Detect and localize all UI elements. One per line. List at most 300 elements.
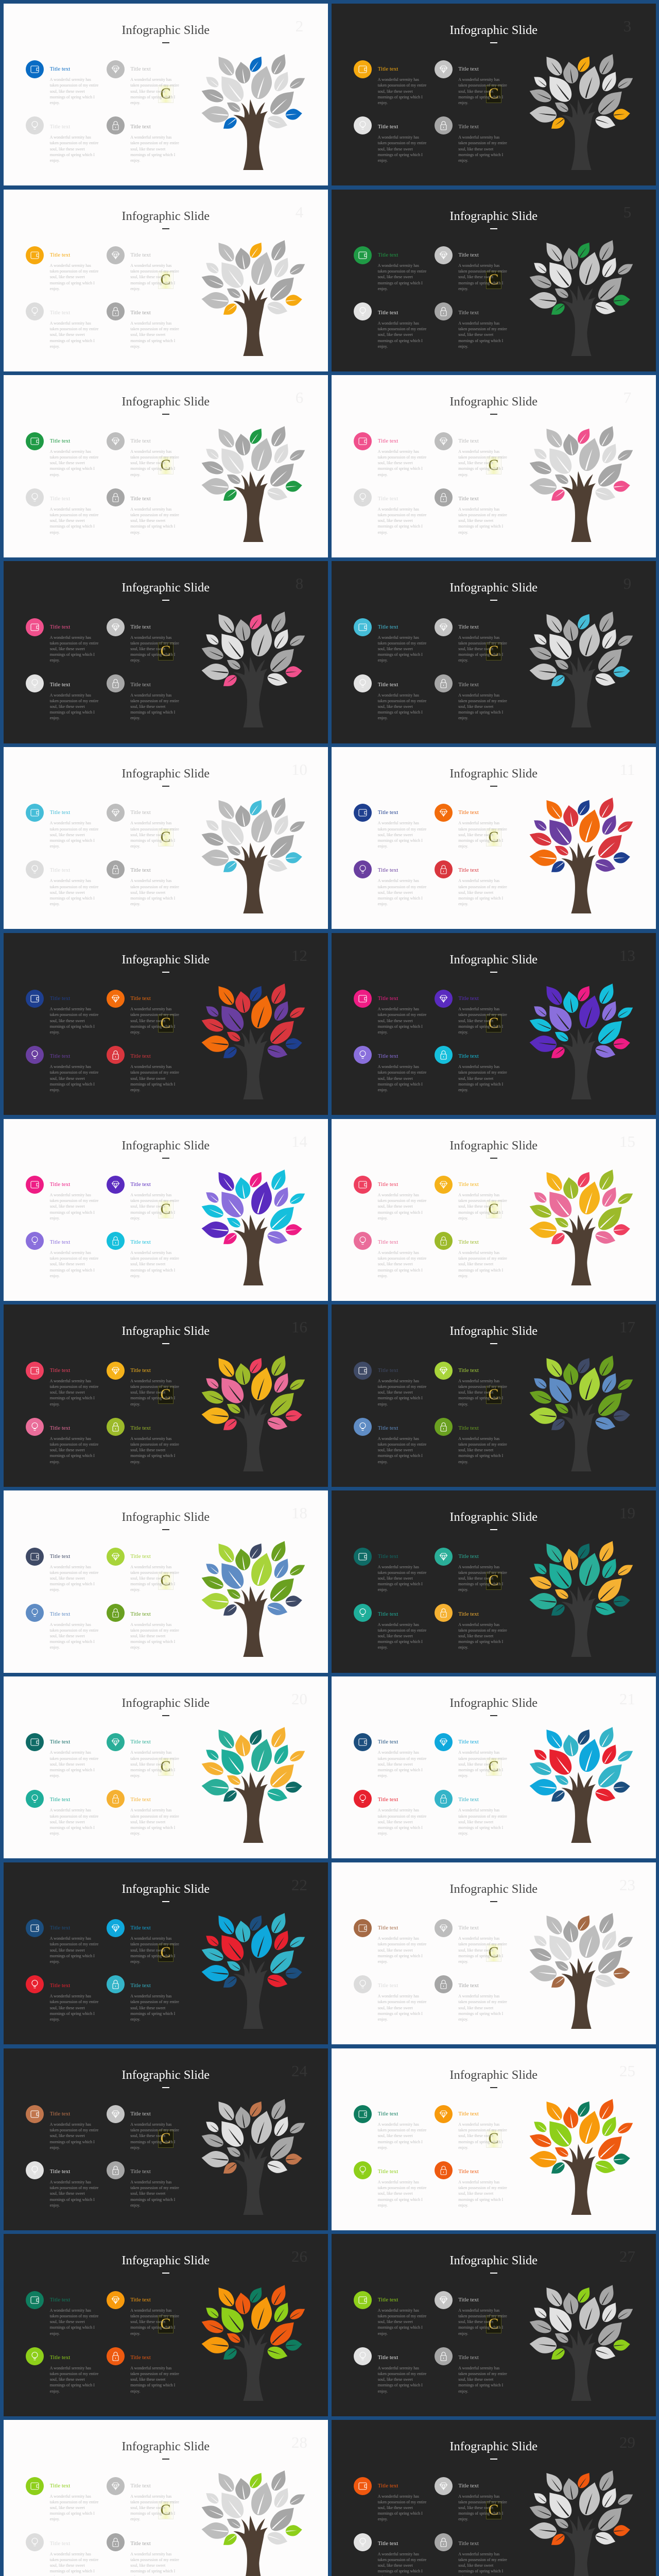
item 2 [106,1733,183,1785]
text: soul, like these sweet [378,833,413,837]
text: mornings of spring which I [50,896,95,901]
title: Infographic Slide [449,395,537,409]
text: soul, like these sweet [130,2563,165,2568]
text: A wonderful serenity has [130,1750,171,1755]
logo [158,828,173,846]
text: mornings of spring which I [378,1396,423,1400]
text: A wonderful serenity has [378,1565,419,1569]
slide 2 [3,4,328,185]
icon [354,246,372,264]
item 4 [435,116,507,163]
icon [435,116,453,134]
text: A wonderful serenity has [458,2308,499,2313]
page number: 13 [619,946,635,964]
text: soul, like these sweet [458,1204,493,1209]
text: soul, like these sweet [378,518,413,523]
item 3 [354,2347,431,2399]
text: soul, like these sweet [378,2319,413,2324]
item 2 [106,1548,183,1599]
logo [158,1758,173,1776]
item 3 [26,1604,103,1655]
text: soul, like these sweet [458,2377,493,2382]
icon [26,2161,44,2179]
text: taken possession of my entire [130,141,179,145]
text: enjoy. [458,2389,468,2394]
heading: Title text [130,438,151,444]
tree [503,960,657,1115]
tree [503,403,657,557]
text: A wonderful serenity has [458,1808,499,1812]
text: soul, like these sweet [130,2505,165,2510]
title: Infographic Slide [122,1324,210,1338]
tree [175,774,330,929]
text: mornings of spring which I [458,1082,503,1087]
text: A wonderful serenity has [378,2552,419,2556]
icon [26,2533,44,2551]
icon [26,860,44,878]
text: taken possession of my entire [458,2314,507,2318]
text: enjoy. [130,158,140,163]
logo: C [488,271,498,287]
text: A wonderful serenity has [378,1808,419,1812]
heading: Title text [130,1367,151,1374]
text: taken possession of my entire [130,513,179,517]
text: taken possession of my entire [130,827,179,832]
text: enjoy. [458,286,468,291]
item 1 [354,990,431,1041]
icon [106,1919,125,1937]
text [458,1250,507,1279]
text: A wonderful serenity has [378,1379,419,1383]
heading: Title text [50,624,70,630]
text: enjoy. [378,158,388,163]
logo [158,2130,173,2147]
title rule [162,414,169,415]
item 1 [354,60,426,105]
text: soul, like these sweet [50,1820,85,1824]
text: enjoy. [50,2145,60,2150]
icon [435,2533,452,2551]
text: enjoy. [458,844,468,849]
logo [486,85,501,103]
text: A wonderful serenity has [378,77,419,82]
text: A wonderful serenity has [378,507,419,512]
heading: Title text [130,1611,151,1617]
text: taken possession of my entire [50,83,98,88]
text [378,1993,426,2022]
text: taken possession of my entire [458,455,507,460]
icon [354,804,372,822]
logo: C [160,1572,171,1589]
text: enjoy. [130,530,140,535]
text [50,1993,98,2022]
title: Infographic Slide [122,1882,210,1896]
text: A wonderful serenity has [458,77,499,82]
text: mornings of spring which I [458,1768,503,1772]
text: enjoy. [130,902,140,906]
item 3 [26,1975,103,2027]
text [458,2122,507,2150]
text: soul, like these sweet [458,1634,493,1638]
item 3 [354,1604,431,1655]
icon [435,2161,452,2179]
title: Infographic Slide [122,953,210,967]
item 2 [435,246,512,298]
icon [106,2291,125,2309]
text: enjoy. [458,1645,468,1650]
text [50,692,98,721]
tree [175,2262,330,2416]
text: enjoy. [50,1831,60,1836]
title: Infographic Slide [122,1510,210,1524]
item 2 [435,2291,512,2343]
heading: Title text [378,1239,398,1245]
text: mornings of spring which I [378,1453,423,1458]
text: A wonderful serenity has [50,1379,91,1383]
tree [175,1332,330,1487]
text: mornings of spring which I [50,652,95,657]
text: A wonderful serenity has [130,693,171,698]
text: A wonderful serenity has [130,1622,171,1627]
page number: 5 [623,203,631,221]
page number: 28 [291,2433,307,2451]
text: mornings of spring which I [378,1210,423,1215]
text: A wonderful serenity has [378,878,419,883]
icon [354,1548,372,1566]
item 3 [26,116,98,163]
icon [106,2161,125,2179]
text: soul, like these sweet [458,332,493,337]
heading: Title text [50,1367,70,1374]
text: taken possession of my entire [458,1384,507,1389]
text: taken possession of my entire [378,1198,426,1203]
text: mornings of spring which I [50,1954,95,1958]
title: Infographic Slide [449,1324,537,1338]
text: mornings of spring which I [378,2383,423,2387]
text [130,321,179,349]
heading: Title text [458,1982,479,1989]
logo [158,456,173,474]
item 2 [107,60,179,105]
heading: Title text [50,2297,70,2303]
text: soul, like these sweet [130,1204,165,1209]
item 4 [435,1975,512,2027]
text: enjoy. [378,2145,388,2150]
title: Infographic Slide [449,209,537,223]
text: A wonderful serenity has [130,2122,171,2127]
logo: C [160,2315,171,2332]
text: A wonderful serenity has [378,1622,419,1627]
text: A wonderful serenity has [50,1750,91,1755]
text: A wonderful serenity has [130,1808,171,1812]
icon [435,60,453,78]
text: mornings of spring which I [378,2140,423,2144]
text: taken possession of my entire [130,327,179,331]
text: enjoy. [50,1645,60,1650]
heading: Title text [458,624,479,630]
tree [503,2447,657,2576]
heading: Title text [378,624,398,630]
text: enjoy. [50,100,60,105]
text: mornings of spring which I [130,338,175,343]
text: soul, like these sweet [130,2191,165,2196]
heading: Title text [378,2540,398,2547]
text: taken possession of my entire [50,1942,98,1946]
tree [503,588,657,743]
icon [26,432,44,450]
text [130,77,179,105]
text: soul, like these sweet [50,833,85,837]
item 4 [106,1418,183,1469]
text: mornings of spring which I [130,2325,175,2330]
text: soul, like these sweet [458,704,493,709]
text: A wonderful serenity has [378,263,419,268]
text: A wonderful serenity has [458,1250,499,1255]
heading: Title text [378,1053,398,1059]
icon [354,860,372,878]
slide 10 [3,747,328,929]
text: enjoy. [378,844,388,849]
text: taken possession of my entire [458,1570,507,1575]
text: enjoy. [130,1773,140,1778]
text: A wonderful serenity has [378,2308,419,2313]
text [458,1436,507,1465]
item 4 [435,302,512,354]
text [49,321,98,349]
text: A wonderful serenity has [130,878,171,883]
title rule [162,972,169,973]
text: soul, like these sweet [378,332,413,337]
icon [107,116,125,134]
icon [435,2347,452,2365]
text: taken possession of my entire [50,1198,98,1203]
text [50,635,98,664]
text: mornings of spring which I [458,2511,503,2516]
slide 17 [332,1304,656,1487]
text: mornings of spring which I [130,1825,175,1830]
icon [26,1232,44,1250]
text: enjoy. [458,2517,468,2521]
title: Infographic Slide [122,581,210,595]
text: mornings of spring which I [50,1268,95,1273]
text: enjoy. [458,1216,468,1221]
item 1 [26,60,98,105]
text: enjoy. [50,2017,60,2022]
item 2 [107,246,179,291]
icon [354,302,372,320]
heading: Title text [458,1739,479,1745]
text: mornings of spring which I [378,2569,423,2573]
logo [158,642,173,660]
logo [486,1200,501,1218]
page number: 12 [291,946,307,964]
heading: Title text [130,2297,151,2303]
item 4 [435,1232,512,1283]
item 4 [106,2347,183,2399]
text: taken possession of my entire [50,455,98,460]
text: A wonderful serenity has [458,321,499,326]
text: soul, like these sweet [378,461,413,465]
text [130,1006,179,1035]
text: mornings of spring which I [130,2140,175,2144]
title: Infographic Slide [449,2439,537,2453]
heading: Title text [50,2168,70,2175]
text: taken possession of my entire [458,2185,507,2190]
text: taken possession of my entire [458,1256,507,1261]
heading: Title text [130,867,151,873]
text: soul, like these sweet [130,1076,165,1081]
text [130,2494,179,2522]
text [130,449,179,478]
text: enjoy. [130,844,140,849]
heading: Title text [378,2297,398,2303]
text: A wonderful serenity has [50,1007,91,1011]
text: soul, like these sweet [458,89,493,94]
text: enjoy. [130,1088,140,1092]
text: soul, like these sweet [458,2563,493,2568]
icon [106,1232,125,1250]
text: soul, like these sweet [378,1204,413,1209]
text: taken possession of my entire [130,1814,179,1819]
text: A wonderful serenity has [130,449,171,454]
text: soul, like these sweet [378,1762,413,1767]
item 1 [354,1733,431,1785]
text: taken possession of my entire [50,1756,98,1761]
text [458,2551,507,2576]
item 4 [435,2347,512,2399]
title: Infographic Slide [122,1696,210,1710]
text: soul, like these sweet [50,1262,85,1266]
item 1 [354,1362,431,1413]
text: taken possession of my entire [130,1756,179,1761]
title rule [490,1901,497,1902]
icon [106,1790,125,1808]
heading: Title text [50,1925,70,1931]
item 4 [107,302,179,349]
text: mornings of spring which I [458,1268,503,1273]
logo: C [160,1386,171,1403]
heading: Title text [50,252,70,258]
title: Infographic Slide [449,2068,537,2081]
item 3 [26,488,103,540]
text: taken possession of my entire [130,1012,179,1017]
heading: Title text [458,1611,479,1617]
page number: 23 [619,1876,635,1894]
heading: Title text [458,310,479,316]
icon [26,804,44,822]
text: taken possession of my entire [458,269,507,274]
text [458,1936,507,1964]
text [458,1192,507,1221]
slide 18 [3,1490,328,1673]
page number: 2 [296,17,303,35]
icon [435,432,452,450]
text: taken possession of my entire [458,1628,507,1633]
text: taken possession of my entire [50,327,98,331]
text: taken possession of my entire [130,83,179,88]
text: A wonderful serenity has [458,1436,499,1441]
title: Infographic Slide [122,2253,210,2267]
text: enjoy. [50,1030,60,1035]
logo [486,271,501,289]
text: taken possession of my entire [130,2128,179,2132]
text: taken possession of my entire [130,1256,179,1261]
text: A wonderful serenity has [50,693,91,698]
title rule [490,600,497,601]
logo [486,2501,501,2519]
text: soul, like these sweet [378,1948,413,1953]
page number: 15 [619,1132,635,1150]
heading: Title text [130,496,151,502]
item 4 [106,488,183,540]
item 2 [435,804,512,855]
text [378,506,426,535]
icon [354,2291,372,2309]
logo [158,271,173,289]
heading: Title text [378,124,398,130]
logo: C [160,1944,171,1961]
text: taken possession of my entire [50,1442,98,1447]
text: taken possession of my entire [50,1256,98,1261]
text: mornings of spring which I [458,1453,503,1458]
text: enjoy. [130,1460,140,1464]
item 3 [354,1046,431,1097]
text [378,2122,426,2150]
title: Infographic Slide [122,2068,210,2081]
item 2 [106,2291,183,2343]
text: A wonderful serenity has [378,2122,419,2127]
icon [106,2477,125,2495]
text: mornings of spring which I [378,152,423,157]
text: A wonderful serenity has [458,507,499,512]
icon [435,246,452,264]
item 4 [435,1046,512,1097]
text: soul, like these sweet [130,1576,165,1581]
text [130,878,179,907]
text: mornings of spring which I [378,896,423,901]
text: soul, like these sweet [458,1262,493,1266]
text [378,1750,426,1778]
text: A wonderful serenity has [50,1193,91,1197]
text: mornings of spring which I [378,466,423,471]
text: A wonderful serenity has [378,1750,419,1755]
text: taken possession of my entire [378,2185,426,2190]
text: mornings of spring which I [378,1082,423,1087]
item 3 [26,2347,103,2399]
text [130,692,179,721]
tree [503,2262,657,2416]
text: taken possession of my entire [378,2500,426,2504]
title: Infographic Slide [449,2253,537,2267]
logo [486,2315,501,2333]
text [378,2179,426,2208]
logo: C [488,1944,498,1961]
icon [26,1362,44,1380]
text: mornings of spring which I [378,710,423,715]
text [458,1993,507,2022]
text: A wonderful serenity has [50,2308,91,2313]
logo [486,2130,501,2147]
text: enjoy. [458,1274,468,1278]
text: A wonderful serenity has [130,2308,171,2313]
text [458,820,507,849]
text: mornings of spring which I [50,281,95,285]
logo [158,1572,173,1590]
item 3 [354,860,431,912]
text: A wonderful serenity has [50,77,91,82]
item 3 [26,860,103,912]
text: mornings of spring which I [130,2011,175,2016]
